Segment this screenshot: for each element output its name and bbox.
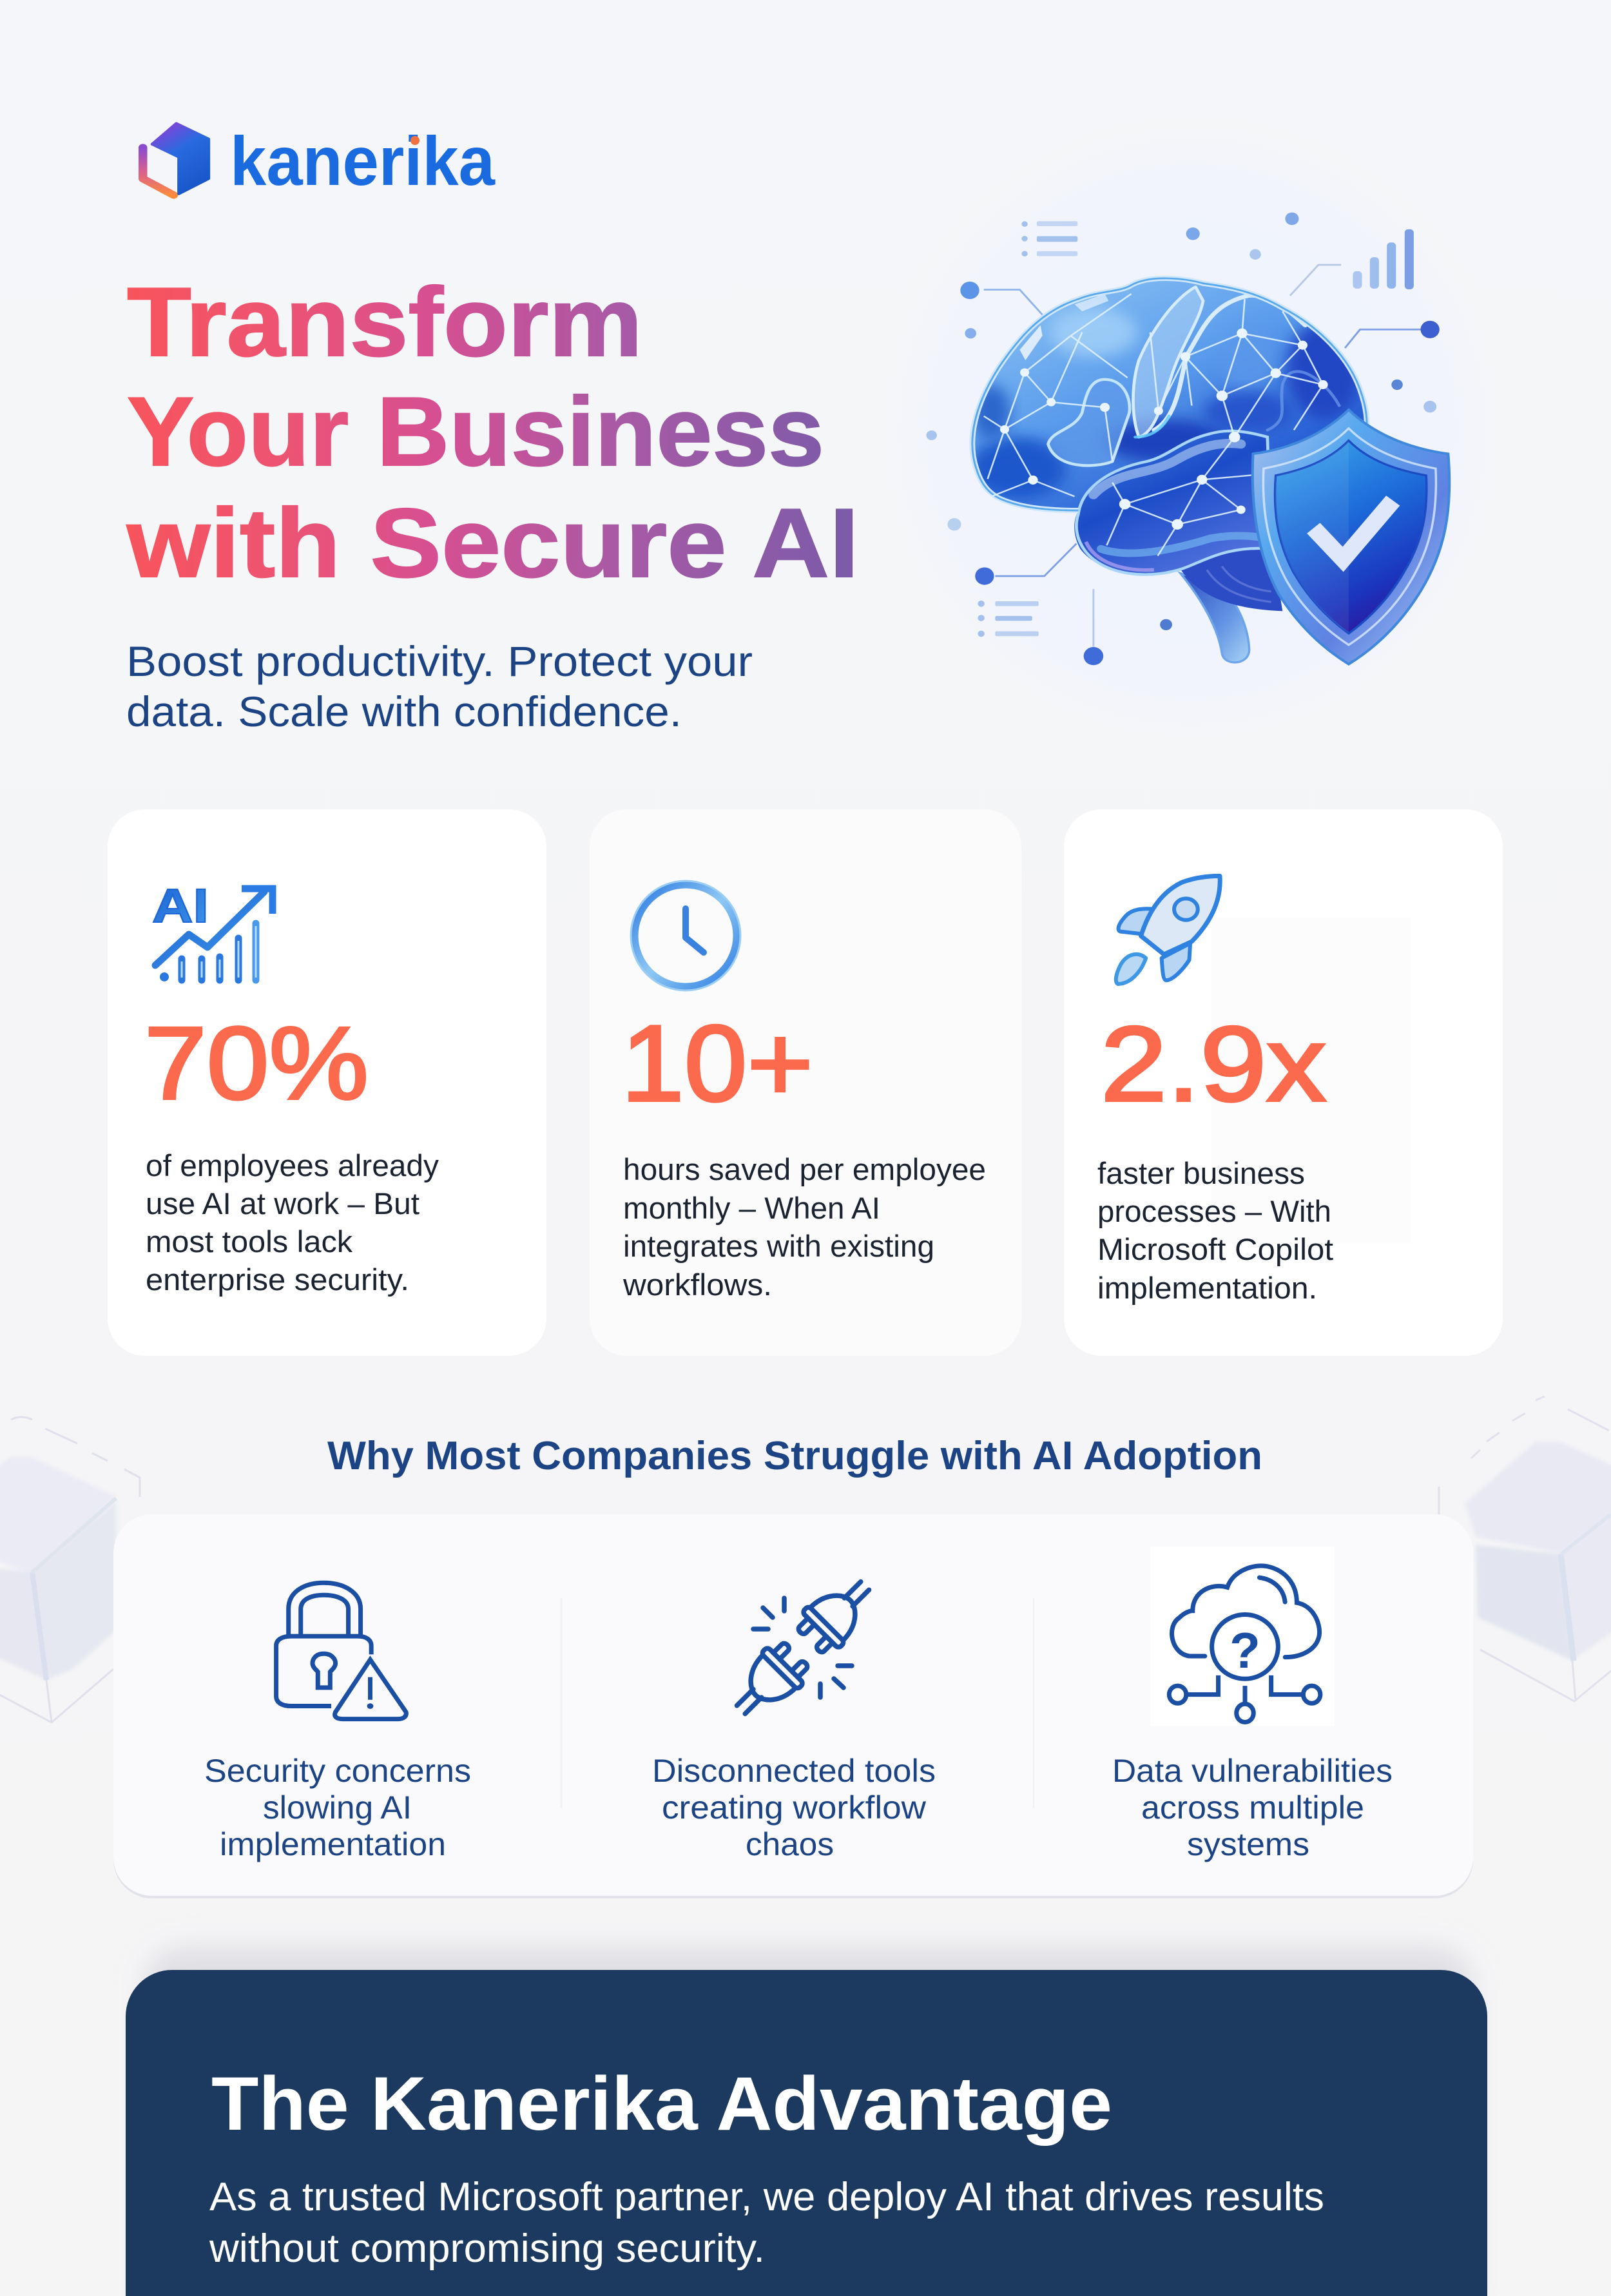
panel body text: without compromising security.: [209, 2226, 765, 2271]
logo: kanerika: [143, 122, 496, 200]
stat description: monthly – When AI: [623, 1191, 880, 1225]
decoration: right glass cube: [1439, 1396, 1611, 1701]
stat number: 2.9x: [1101, 1005, 1326, 1123]
title: [126, 267, 859, 598]
stat description: use AI at work – But: [146, 1186, 420, 1220]
stat description: enterprise security.: [146, 1262, 409, 1297]
stat description: integrates with existing: [623, 1229, 934, 1263]
caption: disconnected tools: chaos: [746, 1826, 834, 1862]
stat description: processes – With: [1097, 1194, 1331, 1228]
temporal lobe: [1076, 431, 1271, 575]
caption: disconnected tools: creating workflow: [662, 1790, 927, 1826]
icon: cloud with question mark: [1150, 1547, 1335, 1726]
panel: the Kanerika advantage: [126, 1947, 1487, 2296]
panel body text: [209, 2175, 1324, 2271]
stat description: faster business: [1097, 1156, 1305, 1190]
stat description: most tools lack: [146, 1224, 353, 1259]
caption: security concerns: slowing AI: [263, 1790, 412, 1826]
panel: adoption challenges: [113, 1514, 1473, 1898]
subtitle: [126, 637, 753, 735]
caption: disconnected tools: Disconnected tools: [652, 1753, 936, 1789]
stat description: [622, 1152, 986, 1302]
section heading: Why Most Companies Struggle with AI Adoption: [327, 1434, 1262, 1478]
title: Transform: [127, 267, 642, 377]
caption: data vulnerabilities: across multiple: [1141, 1790, 1364, 1826]
stat description: [146, 1148, 439, 1297]
icon: padlock with warning: [276, 1583, 406, 1719]
stat description: workflows.: [622, 1268, 772, 1302]
decoration: left glass cube: [0, 1417, 140, 1722]
wordmark: kanerika: [230, 122, 496, 200]
panel: stat card 2.9x: [1064, 809, 1503, 1356]
cerebrum: [969, 278, 1367, 575]
icon: rocket: [1116, 876, 1220, 984]
stat description: [1097, 1156, 1333, 1305]
neural network lines: [984, 294, 1328, 556]
brain outline glow: [972, 278, 1367, 510]
stat description: of employees already: [146, 1148, 439, 1182]
panel: stat card 10+: [590, 809, 1021, 1356]
stat description: hours saved per employee: [623, 1152, 986, 1186]
icon: AI growth chart: [152, 879, 273, 981]
caption: data vulnerabilities: Data vulnerabilities: [1112, 1753, 1393, 1789]
stat number: 70%: [144, 1005, 369, 1121]
title: with Secure AI: [126, 488, 859, 598]
caption: disconnected tools: [652, 1753, 936, 1862]
data callouts around brain: [927, 213, 1440, 665]
panel: stat card 70%: [108, 809, 546, 1356]
stat number: 10+: [621, 1003, 813, 1124]
caption: security concerns: [204, 1753, 471, 1862]
caption: security concerns: implementation: [220, 1826, 446, 1862]
stat description: implementation.: [1097, 1271, 1317, 1305]
icon: AI growth chart: AI: [152, 879, 209, 932]
stat description: Microsoft Copilot: [1097, 1232, 1333, 1266]
caption: data vulnerabilities: systems: [1187, 1826, 1309, 1862]
caption: data vulnerabilities: [1112, 1753, 1393, 1862]
panel heading: The Kanerika Advantage: [211, 2061, 1112, 2146]
panel body text: As a trusted Microsoft partner, we deploy AI that drives results: [209, 2175, 1324, 2219]
brain folds: [1048, 287, 1339, 465]
caption: security concerns: Security concerns: [204, 1753, 471, 1789]
title: Your Business: [127, 377, 824, 487]
icon: logo cube: [143, 124, 209, 195]
brain stem and cerebellum: [1177, 542, 1282, 662]
shield with check mark: [1253, 410, 1449, 664]
illustration: glass brain with shield: [927, 213, 1451, 666]
icon: disconnected plugs: [723, 1568, 883, 1728]
subtitle: data. Scale with confidence.: [126, 688, 682, 735]
icon: cloud with question mark: ?: [1230, 1622, 1260, 1679]
icon: clock: [631, 881, 740, 990]
subtitle: Boost productivity. Protect your: [126, 637, 753, 685]
